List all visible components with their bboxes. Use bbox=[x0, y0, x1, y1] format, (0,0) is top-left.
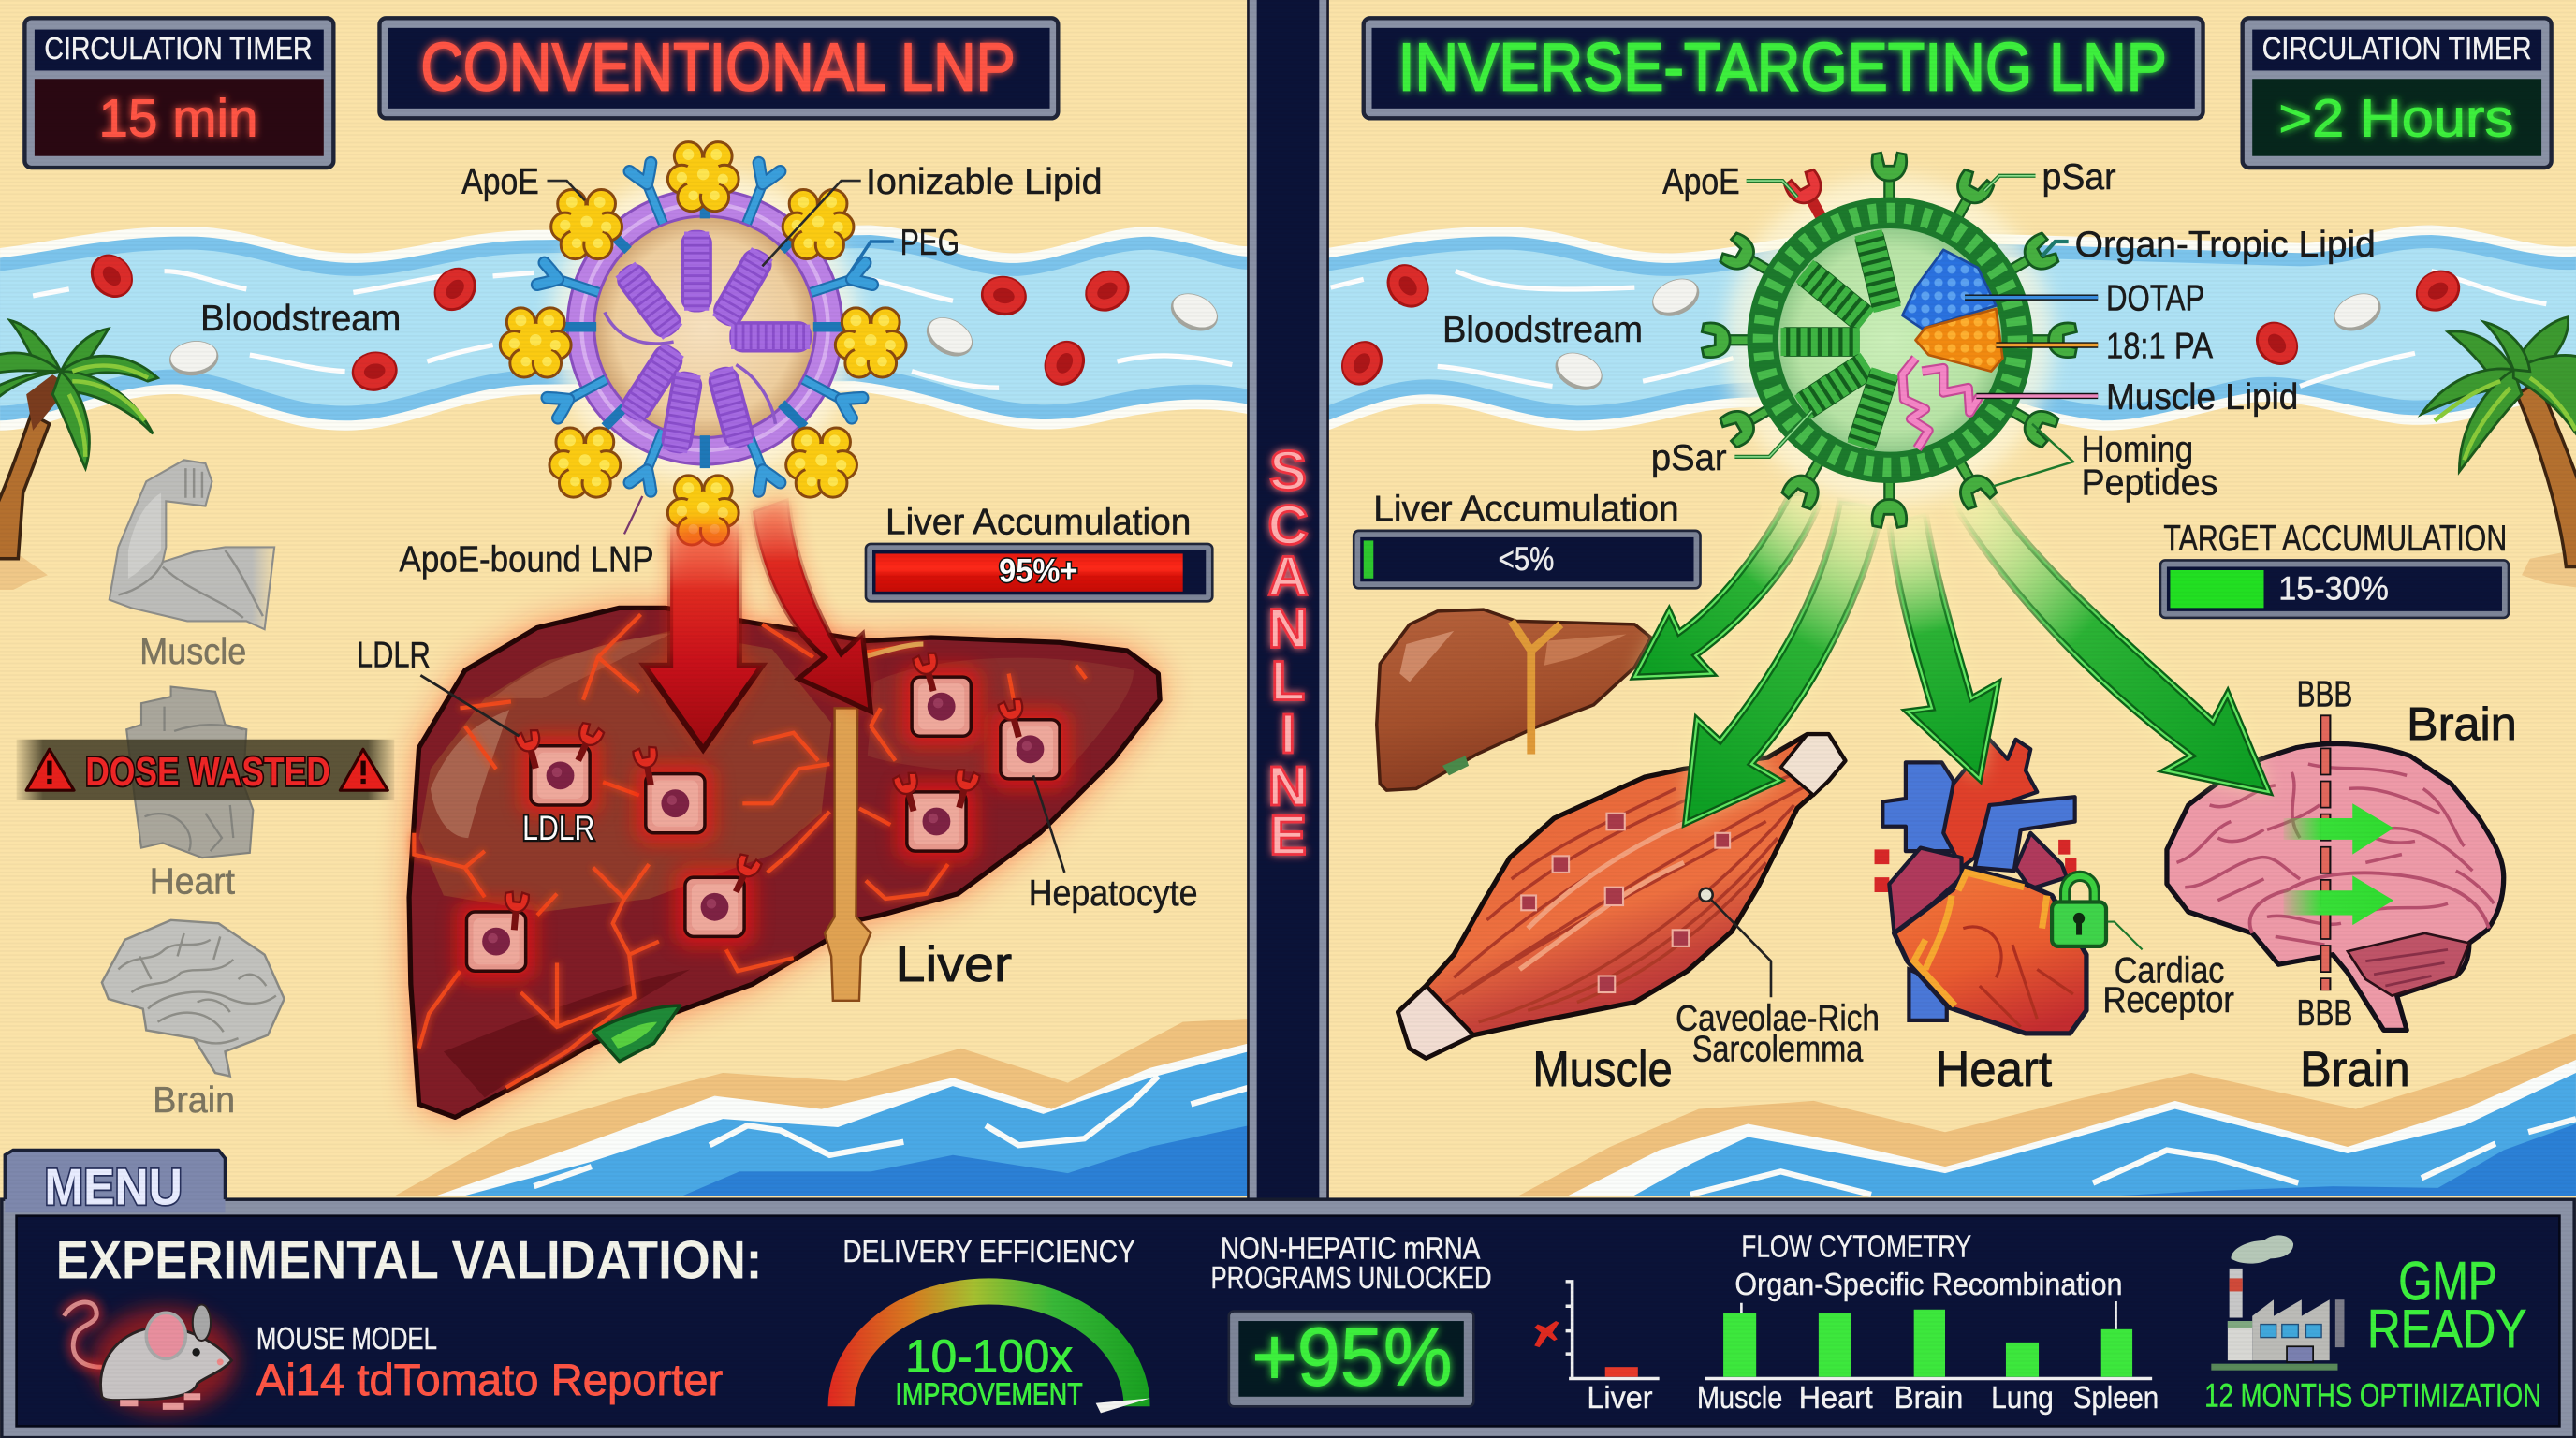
divider with SCANLINE label: N bbox=[1267, 755, 1309, 817]
divider with SCANLINE label: L bbox=[1271, 650, 1305, 712]
label: pSar top: pSar bbox=[2042, 157, 2116, 198]
chart: liver bbox=[1534, 1282, 1660, 1416]
arrow: main red to liver bbox=[644, 524, 762, 749]
palm tree right bbox=[2422, 317, 2576, 588]
timer: conventional bbox=[24, 18, 333, 168]
helical rods bbox=[1781, 229, 1902, 451]
panel: experimental validation bbox=[2, 1151, 2574, 1438]
label: Hepatocyte bbox=[1029, 775, 1197, 914]
bloodstream cells right bbox=[1333, 256, 2467, 397]
organ labels right: BBB bbox=[2297, 675, 2352, 715]
18:1 PA block bbox=[1915, 309, 2002, 372]
divider with SCANLINE label: I bbox=[1281, 702, 1295, 765]
arrows through BBB bbox=[2284, 803, 2393, 925]
chart: organ recombination bars: Brain bbox=[1895, 1381, 1963, 1416]
PEG chains bbox=[537, 163, 872, 492]
muscle lipid squiggles bbox=[1902, 359, 1980, 448]
non-hepatic heading bbox=[1211, 1231, 1492, 1296]
organ labels right: BBB bbox=[2297, 993, 2352, 1034]
timer: conventional: 15 min bbox=[98, 89, 258, 148]
palm tree left bbox=[0, 320, 158, 590]
flow cytometry heading: Organ-Specific Recombination bbox=[1734, 1268, 2123, 1302]
ghost organ: muscle bbox=[110, 460, 274, 629]
flow cytometry heading bbox=[1734, 1230, 2123, 1302]
text: reporter: Ai14 tdTomato Reporter bbox=[256, 1356, 723, 1405]
label: PEG bbox=[851, 223, 959, 271]
liver accumulation readout bbox=[866, 502, 1212, 601]
red ApoE wrench bbox=[1783, 168, 1837, 227]
label: LDLR pointer bbox=[357, 636, 520, 736]
bloodstream cells bbox=[81, 245, 1224, 395]
menu tab bbox=[5, 1151, 225, 1215]
label: LDLR pointer: LDLR bbox=[357, 636, 431, 676]
organ labels right bbox=[1532, 675, 2517, 1097]
label: ApoE-bound LNP bbox=[400, 496, 654, 580]
label: Liver: Liver bbox=[896, 937, 1012, 992]
banner: dose wasted bbox=[17, 740, 394, 800]
ghost label: Muscle: Muscle bbox=[139, 632, 246, 672]
liver accumulation readout right: <5% bbox=[1499, 541, 1554, 578]
chart: organ recombination bars: Muscle bbox=[1697, 1381, 1782, 1416]
label: ApoE-bound LNP: ApoE-bound LNP bbox=[400, 540, 654, 580]
panel: conventional LNP side bbox=[0, 18, 1249, 1196]
ghost label: Heart: Heart bbox=[150, 862, 235, 902]
tendon ends bbox=[1398, 986, 1473, 1058]
arrow: to liver bbox=[1634, 493, 1823, 677]
chart: liver: Liver bbox=[1587, 1381, 1653, 1416]
gauge: 10-100x bbox=[905, 1331, 1074, 1382]
chart: organ recombination bars bbox=[1697, 1301, 2159, 1416]
gauge bbox=[842, 1291, 1150, 1413]
non-hepatic heading: PROGRAMS UNLOCKED bbox=[1211, 1261, 1492, 1296]
warning icon right bbox=[340, 749, 388, 790]
+95% readout: +95% bbox=[1251, 1311, 1453, 1402]
label: Organ-Tropic Lipid: Organ-Tropic Lipid bbox=[2075, 225, 2376, 265]
organ labels right: Brain bbox=[2407, 699, 2517, 750]
timer: inverse-targeting: >2 Hours bbox=[2278, 89, 2513, 148]
liver accumulation readout: 95%+ bbox=[999, 552, 1077, 589]
label: Ionizable Lipid: Ionizable Lipid bbox=[866, 162, 1103, 202]
organ labels right: Caveolae-Rich bbox=[1676, 998, 1880, 1038]
title: conventional: CONVENTIONAL LNP bbox=[420, 31, 1016, 106]
arrow: to brain bbox=[1952, 493, 2269, 792]
label: pSar left bbox=[1651, 411, 1812, 478]
liver vasculature bbox=[414, 614, 1086, 1088]
ghost organ: brain bbox=[102, 920, 285, 1077]
ghost organ: heart bbox=[126, 687, 253, 858]
shoreline right bbox=[1518, 1034, 2576, 1196]
gallbladder bbox=[593, 1005, 681, 1062]
ghost label: Brain: Brain bbox=[153, 1080, 235, 1121]
warning icon left bbox=[26, 749, 74, 790]
chart: organ recombination bars: Spleen bbox=[2073, 1381, 2159, 1416]
text: mouse model: MOUSE MODEL bbox=[256, 1322, 437, 1357]
liver accumulation readout: Liver Accumulation bbox=[886, 502, 1191, 542]
GMP ready: READY bbox=[2367, 1299, 2526, 1359]
label: Bloodstream left: Bloodstream bbox=[200, 299, 401, 339]
LNP: inverse-targeting bbox=[1702, 153, 2076, 527]
organ: muscle bbox=[1398, 734, 1845, 1058]
LNP: conventional bbox=[500, 142, 906, 545]
non-hepatic heading: NON-HEPATIC mRNA bbox=[1221, 1231, 1481, 1266]
label: PEG: PEG bbox=[900, 223, 959, 263]
bloodstream river right bbox=[1327, 225, 2576, 431]
blood-brain barrier line bbox=[2322, 714, 2329, 990]
arrow: to muscle bbox=[1686, 501, 1882, 823]
label: 18:1 PA: 18:1 PA bbox=[2106, 327, 2213, 367]
bloodstream river left bbox=[0, 225, 1249, 431]
ionizable lipid rods bbox=[612, 230, 812, 456]
label: Homing Peptides bbox=[1993, 424, 2217, 503]
label: Homing Peptides: Homing bbox=[2082, 430, 2193, 470]
label: Hepatocyte: Hepatocyte bbox=[1029, 873, 1197, 914]
arrow: to heart bbox=[1889, 513, 1998, 779]
divider with SCANLINE label: A bbox=[1267, 544, 1309, 607]
panel: inverse-targeting LNP side bbox=[1327, 18, 2576, 1196]
label: Ionizable Lipid bbox=[762, 162, 1103, 266]
hepatocytes with LDLR receptors bbox=[457, 652, 1070, 981]
organ labels right: Brain bbox=[2300, 1042, 2410, 1097]
label: Homing Peptides: Peptides bbox=[2082, 462, 2217, 503]
flow cytometry heading: FLOW CYTOMETRY bbox=[1741, 1230, 1971, 1265]
gauge: IMPROVEMENT bbox=[896, 1378, 1083, 1413]
organ labels right: Cardiac bbox=[2115, 951, 2224, 991]
title: inverse-targeting bbox=[1364, 18, 2203, 118]
GMP ready: GMP bbox=[2398, 1252, 2497, 1312]
label: Muscle Lipid: Muscle Lipid bbox=[2106, 377, 2298, 418]
label: DOTAP: DOTAP bbox=[2106, 279, 2204, 319]
divider with SCANLINE label: C bbox=[1267, 493, 1309, 556]
arrow: curved red to liver bbox=[753, 498, 871, 712]
divider with SCANLINE label bbox=[1247, 0, 1329, 1199]
ApoE clusters bbox=[500, 142, 906, 545]
label: ApoE right: ApoE bbox=[1662, 162, 1740, 202]
divider with SCANLINE label: S bbox=[1269, 439, 1307, 502]
label: pSar left: pSar bbox=[1651, 438, 1727, 478]
peptide wrenches bbox=[1702, 153, 2076, 527]
target accumulation readout: 15-30% bbox=[2278, 571, 2389, 608]
DOTAP block bbox=[1902, 250, 1996, 329]
shoreline left bbox=[394, 1019, 1249, 1196]
organ: heart bbox=[1875, 740, 2086, 1034]
liver lighter lobe shading bbox=[419, 631, 831, 912]
organ: small liver bbox=[1377, 609, 1651, 790]
GMP ready bbox=[2367, 1252, 2526, 1359]
label: Bloodstream right: Bloodstream bbox=[1442, 310, 1643, 350]
label: LDLR in cell: LDLR bbox=[522, 809, 594, 847]
icon: mouse bbox=[65, 1302, 237, 1413]
banner: dose wasted: DOSE WASTED bbox=[85, 749, 330, 795]
organ labels right: Heart bbox=[1935, 1042, 2052, 1097]
title: inverse-targeting: INVERSE-TARGETING LNP bbox=[1398, 31, 2167, 106]
organ labels right: Receptor bbox=[2102, 980, 2234, 1020]
label: ApoE left: ApoE bbox=[461, 162, 539, 202]
icon: green lock bbox=[2052, 876, 2106, 946]
big liver bbox=[409, 608, 1160, 1117]
label: pSar top bbox=[1984, 157, 2116, 198]
menu tab: MENU bbox=[44, 1158, 183, 1215]
liver accumulation readout right bbox=[1354, 489, 1701, 588]
heading: experimental validation: EXPERIMENTAL VALIDATION: bbox=[56, 1230, 762, 1290]
divider with SCANLINE label: N bbox=[1267, 596, 1309, 659]
target accumulation readout bbox=[2160, 519, 2509, 618]
organ labels right: Sarcolemma bbox=[1692, 1030, 1864, 1070]
bile duct bbox=[825, 708, 871, 1001]
icon: factory bbox=[2211, 1235, 2344, 1371]
delivery efficiency heading: DELIVERY EFFICIENCY bbox=[842, 1235, 1135, 1269]
timer: conventional: CIRCULATION TIMER bbox=[44, 32, 313, 66]
title: conventional bbox=[379, 18, 1058, 118]
timer: inverse-targeting: CIRCULATION TIMER bbox=[2262, 32, 2532, 66]
liver accumulation readout right: Liver Accumulation bbox=[1373, 489, 1679, 529]
timer: inverse-targeting bbox=[2243, 18, 2552, 168]
organ: brain bbox=[2167, 744, 2504, 1030]
divider with SCANLINE label: E bbox=[1269, 804, 1307, 867]
label: ApoE right bbox=[1662, 162, 1797, 202]
chart: organ recombination bars: Lung bbox=[1991, 1381, 2054, 1416]
organ labels right: Muscle bbox=[1532, 1042, 1673, 1097]
chart: organ recombination bars: Heart bbox=[1799, 1381, 1874, 1416]
